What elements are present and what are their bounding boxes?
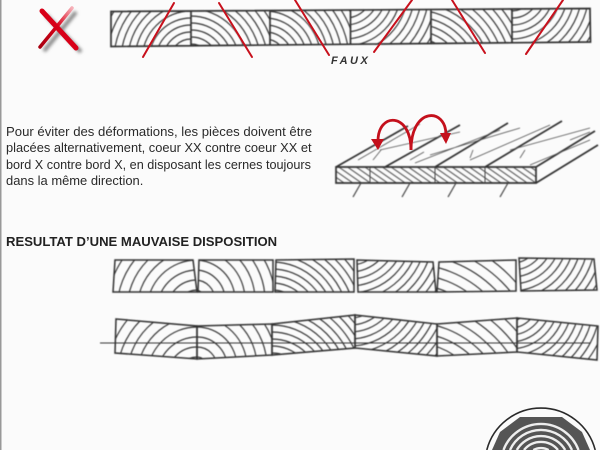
label: FAUX: FAUX: [331, 55, 370, 67]
text block: instructions: bord X contre bord X, en disposant les cernes toujours: [6, 158, 311, 172]
diagram: badly arranged boards, separated: [113, 258, 597, 292]
diagram: badly arranged boards, warped after assembly: [100, 315, 598, 360]
icon: log cross-section: [487, 408, 595, 450]
diagram: wrong board arrangement: [111, 0, 590, 57]
text block: instructions: dans la même direction.: [6, 173, 143, 188]
text block: instructions: [6, 124, 312, 188]
diagram: plank in perspective with arrows: [336, 116, 598, 197]
red strike lines: [143, 0, 563, 57]
heading: bad arrangement result: RESULTAT D’UNE MAUVAISE DISPOSITION: [6, 234, 277, 249]
text block: instructions: Pour éviter des déformations, les pièces doivent être: [6, 124, 312, 139]
page left edge: [0, 0, 2, 450]
icon: red cross: [40, 8, 81, 52]
text block: instructions: placées alternativement, coeur XX contre coeur XX et: [6, 140, 312, 155]
icon: red curved arrows: [371, 116, 451, 150]
